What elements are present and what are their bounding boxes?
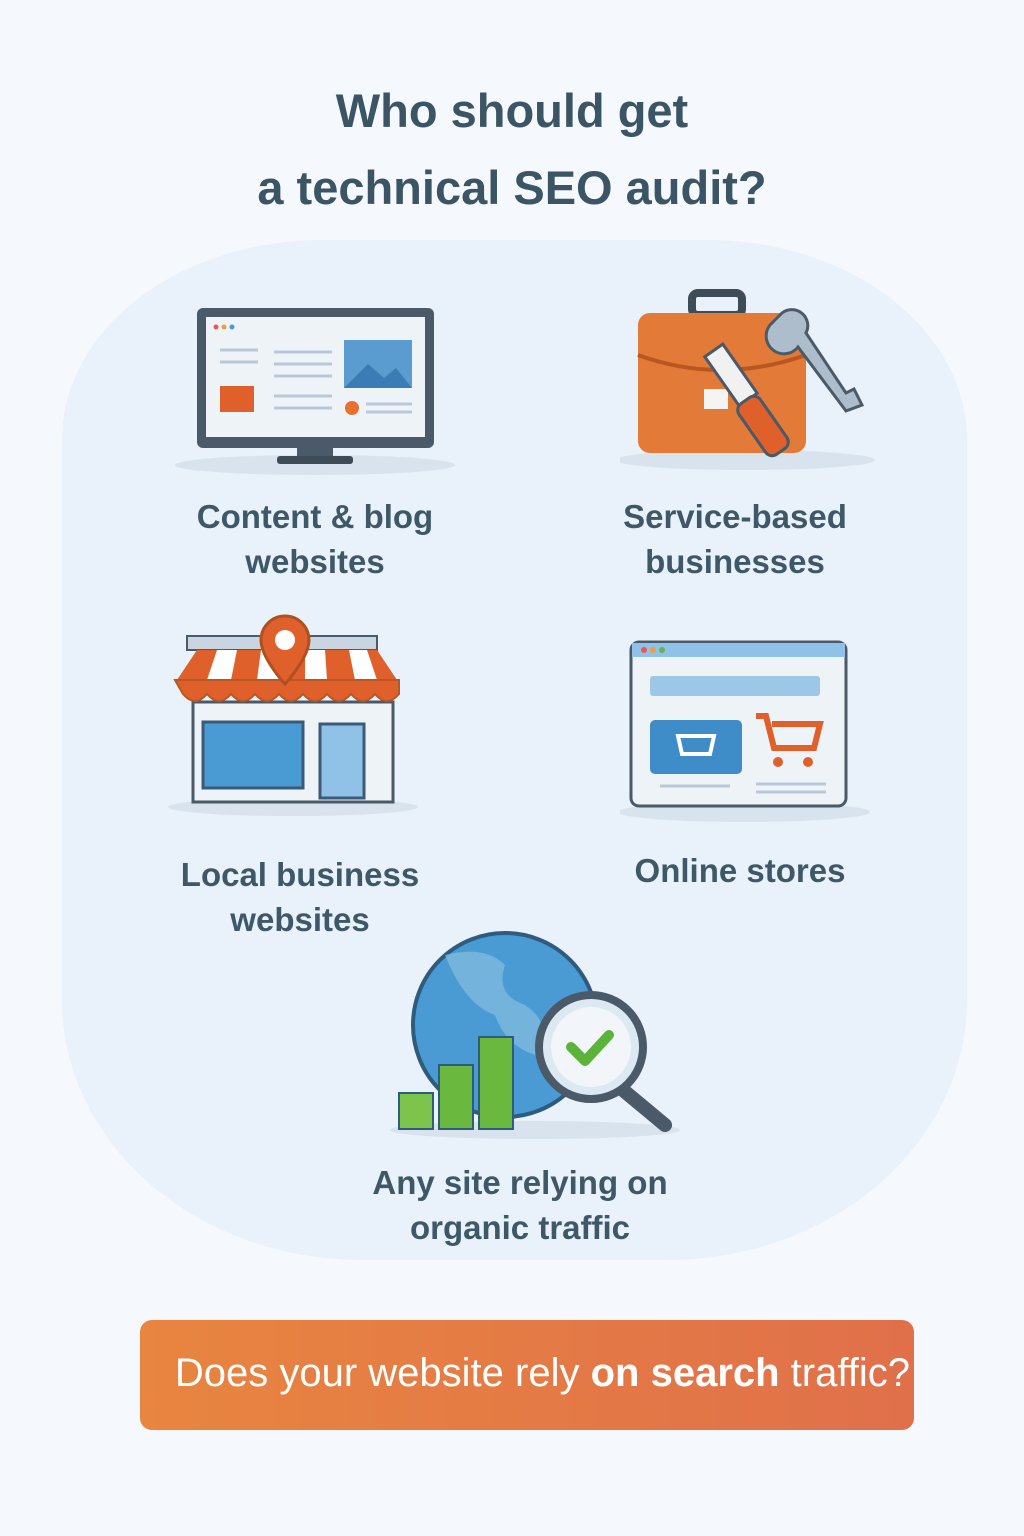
title: a technical SEO audit? [257, 161, 767, 214]
title: Who should get [336, 84, 688, 137]
icon: online store [620, 640, 870, 822]
label: content [197, 498, 433, 580]
label: local [181, 856, 419, 938]
icon: local store [168, 614, 418, 816]
label: service [623, 498, 847, 580]
label: any site: organic traffic [410, 1209, 630, 1246]
label: service: Service-based [623, 498, 847, 535]
label: online: Online stores [635, 852, 845, 889]
label: content: websites [245, 543, 385, 580]
label: local: websites [230, 901, 370, 938]
label: any site [372, 1164, 668, 1246]
icon: briefcase with tools [620, 289, 875, 470]
label: local: Local business [181, 856, 419, 893]
label: any site: Any site relying on [372, 1164, 668, 1201]
background blob [62, 240, 967, 1260]
icon: globe with chart and magnifier [390, 931, 680, 1139]
callout banner: Does your website rely on search traffic? [175, 1351, 910, 1395]
icon: monitor [175, 308, 455, 475]
label: content: Content & blog [197, 498, 433, 535]
title [257, 84, 767, 214]
callout banner [140, 1320, 914, 1430]
label: service: businesses [645, 543, 825, 580]
